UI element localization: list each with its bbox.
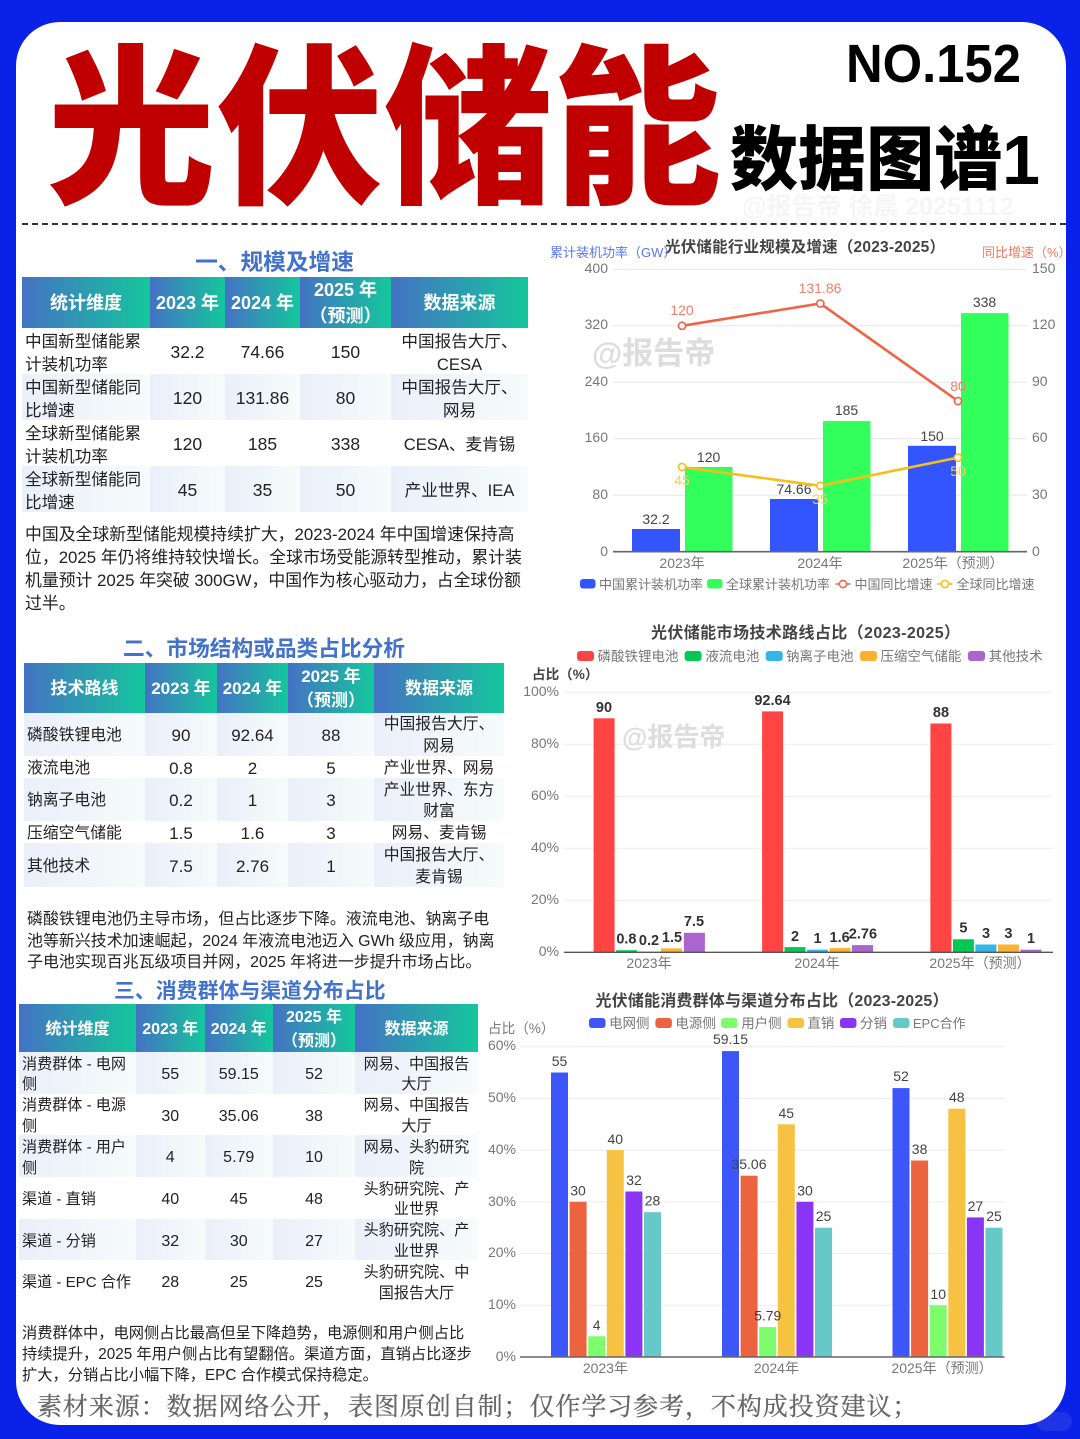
bar value labels: 120	[697, 449, 720, 465]
faint watermark line: @报告帝 徐晨 20251112	[742, 193, 1014, 221]
left axis labels: 320	[585, 316, 608, 332]
table 1: scale and growth: 80	[336, 388, 355, 408]
table 1: scale and growth: 74.66	[241, 342, 284, 362]
table 3: consumer groups and channels: 侧	[22, 1118, 37, 1135]
table 2: technology routes: 麦肯锡	[415, 869, 463, 886]
right axis labels: 90	[1032, 373, 1048, 389]
table 2: technology routes: 7.5	[169, 857, 193, 876]
table 2: technology routes: 中国报告大厅、	[384, 716, 494, 733]
y axis labels: 50%	[488, 1089, 516, 1105]
chart 1 legend	[580, 577, 1035, 592]
bar value labels: 40	[608, 1131, 623, 1147]
table 3: consumer groups and channels: 32	[161, 1233, 179, 1250]
table 3: consumer groups and channels: 25	[305, 1274, 323, 1291]
chart 1 legend: 全球同比增速	[956, 577, 1035, 592]
bar value labels: 1	[1027, 931, 1035, 947]
table 1: scale and growth: 比增速	[25, 492, 75, 512]
chart 1: scale and growth combo chart	[550, 237, 1072, 592]
table 1: scale and growth: 2025 年	[314, 280, 377, 300]
right axis labels: 150	[1032, 260, 1056, 276]
table 1: scale and growth: 全球新型储能累	[25, 424, 141, 442]
line: China growth: 80	[950, 378, 966, 394]
chart 2 legend: 其他技术	[989, 649, 1043, 664]
chart 3 legend: 分销	[860, 1016, 887, 1031]
table 2: technology routes: 2024 年	[223, 679, 282, 698]
table 3: consumer groups and channels: 网易、中国报告	[364, 1097, 469, 1114]
right axis labels	[1032, 260, 1056, 559]
table 2: technology routes: 磷酸铁锂电池	[27, 727, 122, 744]
chart 2 legend: 液流电池	[705, 649, 759, 664]
table 3: consumer groups and channels: 消费群体 - 电源	[22, 1097, 126, 1114]
bar value labels: 92.64	[754, 693, 791, 709]
bar value labels	[596, 693, 1035, 949]
paragraph 2: 子电池实现百兆瓦级项目并网，2025 年将进一步提升市场占比。	[27, 954, 481, 971]
bar value labels: 2	[791, 929, 799, 945]
bars	[551, 1051, 1002, 1357]
table 3: consumer groups and channels: 数据来源	[384, 1020, 448, 1038]
bar value labels: 0.2	[639, 933, 659, 949]
paragraph 1: 位，2025 年仍将维持较快增长。全球市场受能源转型推动，累计装	[25, 548, 522, 567]
table 3: consumer groups and channels: 10	[305, 1149, 323, 1166]
y axis labels: 60%	[488, 1037, 516, 1053]
bar value labels: 2.76	[849, 926, 877, 942]
table 3: consumer groups and channels: 头豹研究院、产	[364, 1222, 469, 1239]
chart 1 title: 光伏储能行业规模及增速（2023-2025）	[665, 237, 945, 256]
table 1: scale and growth: 120	[173, 388, 202, 408]
table 2: technology routes: 1	[326, 857, 336, 876]
line: China growth: 131.86	[799, 280, 842, 296]
bar value labels: 4	[593, 1317, 601, 1333]
table 3: consumer groups and channels: 业世界	[394, 1243, 439, 1260]
chart 1 legend: 全球累计装机功率	[726, 577, 830, 592]
bar value labels: 52	[893, 1068, 909, 1084]
table 3: consumer groups and channels: 35.06	[219, 1108, 259, 1125]
table 3: consumer groups and channels: 30	[161, 1108, 179, 1125]
bar value labels: 45	[779, 1105, 794, 1121]
bar value labels: 90	[596, 700, 612, 716]
bar value labels: 25	[986, 1208, 1002, 1224]
table 2: technology routes: （预测）	[297, 691, 365, 710]
right axis labels: 60	[1032, 429, 1048, 445]
bar value labels: 5	[959, 920, 967, 936]
table 3: consumer groups and channels: 2025 年	[286, 1008, 342, 1026]
table 2: technology routes: 3	[326, 824, 336, 843]
subtitle: 数据图谱1: 数据图谱1	[730, 121, 1040, 199]
bar value labels: 338	[973, 294, 996, 310]
table 2: technology routes: 0.8	[169, 759, 193, 778]
line: China growth: 120	[670, 302, 694, 318]
line: China growth	[670, 280, 966, 405]
chart 1 watermark: @报告帝	[592, 336, 715, 371]
y axis labels: 80%	[531, 735, 559, 751]
left axis labels: 400	[585, 260, 608, 276]
section heading 1: 一、规模及增速	[195, 249, 354, 275]
axis names: 同比增速（%）	[982, 245, 1072, 260]
table 1: scale and growth: 产业世界、IEA	[405, 481, 514, 500]
line: global growth: 45	[674, 472, 690, 488]
table 2: technology routes: 92.64	[231, 726, 274, 745]
bars: global	[685, 313, 1008, 552]
table 2: technology routes: 液流电池	[27, 760, 90, 777]
x axis labels	[659, 555, 1004, 571]
grid and axes	[613, 269, 1027, 495]
left axis labels: 0	[600, 543, 608, 559]
line: global growth: 50	[950, 463, 966, 479]
table 2: technology routes: 中国报告大厅、	[384, 847, 494, 864]
dashed divider	[22, 223, 1066, 225]
table 2: technology routes: 2.76	[236, 857, 269, 876]
table 3: consumer groups and channels: 27	[305, 1233, 323, 1250]
table 3: consumer groups and channels: 头豹研究院、中	[364, 1264, 469, 1281]
table 3: consumer groups and channels: 业世界	[394, 1201, 439, 1218]
table 2: technology routes: 网易、麦肯锡	[392, 825, 486, 842]
bar value labels: 32.2	[642, 511, 670, 527]
x axis labels	[626, 955, 1031, 971]
grid lines	[564, 692, 1053, 900]
x axis labels: 2023年	[626, 955, 672, 971]
table 2: technology routes: 5	[326, 759, 336, 778]
table 1: scale and growth: 120	[173, 434, 202, 454]
table 1: scale and growth: 150	[331, 342, 360, 362]
bar value labels: 7.5	[684, 914, 704, 930]
left axis labels	[585, 260, 608, 559]
paragraph 3: 持续提升，2025 年用户侧占比有望翻倍。渠道方面，直销占比逐步	[22, 1346, 472, 1363]
issue number: NO.152	[846, 34, 1021, 94]
y axis labels: 0%	[496, 1348, 516, 1364]
table 2: technology routes	[24, 663, 504, 887]
table 1: scale and growth: （预测）	[310, 306, 382, 326]
table 3: consumer groups and channels: 40	[161, 1191, 179, 1208]
chart 2: technology share bar chart	[523, 623, 1053, 971]
bar value labels: 25	[816, 1208, 831, 1224]
table 1: scale and growth: 中国新型储能累	[25, 332, 141, 350]
table 2: technology routes: 2025 年	[301, 667, 361, 686]
bar value labels: 1.6	[830, 930, 850, 946]
paragraph 2	[27, 910, 495, 971]
y axis labels: 0%	[539, 943, 559, 959]
table 1: scale and growth: 131.86	[236, 388, 289, 408]
y axis labels: 20%	[488, 1244, 516, 1260]
table 1: scale and growth: CESA	[437, 354, 482, 374]
bar value labels: 5.79	[754, 1308, 782, 1324]
table 1: scale and growth: 数据来源	[424, 293, 496, 313]
chart 3 title: 光伏储能消费群体与渠道分布占比（2023-2025）	[596, 991, 948, 1010]
table 2: technology routes: 3	[326, 791, 336, 810]
bar value labels: 1.5	[662, 930, 682, 946]
y axis labels: 40%	[531, 839, 559, 855]
paragraph 3	[22, 1324, 472, 1384]
table 3: consumer groups and channels: 大厅	[401, 1118, 432, 1135]
table 1: scale and growth	[22, 277, 528, 512]
table 3: consumer groups and channels: 5.79	[223, 1149, 254, 1166]
bar value labels: 28	[645, 1192, 660, 1208]
title: 光伏储能: 光伏储能	[47, 35, 721, 227]
bar value labels	[552, 1031, 1002, 1333]
line: global growth: 35	[812, 491, 828, 507]
bar value labels: 38	[912, 1141, 928, 1157]
y axis labels: 60%	[531, 787, 559, 803]
chart 3 legend: 直销	[807, 1016, 834, 1031]
y axis labels	[488, 1037, 516, 1364]
y axis name: 占比（%）	[488, 1021, 554, 1036]
table 2: technology routes: 1.5	[169, 824, 193, 843]
table 3: consumer groups and channels: 48	[305, 1191, 323, 1208]
table 3: consumer groups and channels: 2023 年	[142, 1020, 198, 1038]
bar value labels: 0.8	[616, 932, 636, 948]
bar value labels: 3	[982, 926, 990, 942]
table 3: consumer groups and channels: 2024 年	[211, 1020, 267, 1038]
table 1: scale and growth: 中国新型储能同	[25, 378, 141, 396]
y axis labels	[523, 683, 559, 959]
table 1: scale and growth: 2023 年	[156, 293, 219, 313]
y axis name: 占比（%）	[532, 666, 598, 682]
chart 2 legend: 压缩空气储能	[880, 649, 961, 664]
table 2: technology routes: 0.2	[169, 791, 193, 810]
bar value labels	[642, 294, 996, 527]
bar value labels: 10	[930, 1286, 946, 1302]
table 3: consumer groups and channels: 45	[230, 1191, 248, 1208]
line: global growth	[674, 454, 966, 507]
table 3: consumer groups and channels: 30	[230, 1233, 248, 1250]
x axis labels: 2024年	[754, 1360, 799, 1376]
table 2: technology routes: 钠离子电池	[27, 792, 106, 809]
table 1: scale and growth: 计装机功率	[25, 354, 108, 374]
table 3: consumer groups and channels	[19, 1004, 478, 1302]
chart 2 legend: 钠离子电池	[786, 648, 854, 664]
bar value labels: 48	[949, 1089, 965, 1105]
bar value labels: 150	[920, 428, 944, 444]
x axis labels: 2025年（预测）	[902, 555, 1004, 571]
chart 3 legend: 电源侧	[675, 1016, 716, 1031]
table 2: technology routes: 2	[248, 759, 257, 778]
paragraph 2: 磷酸铁锂电池仍主导市场，但占比逐步下降。液流电池、钠离子电	[27, 911, 489, 928]
table 1: scale and growth: 中国报告大厅、	[401, 332, 518, 350]
chart 2 legend: 磷酸铁锂电池	[598, 649, 678, 664]
table 3: consumer groups and channels: （预测）	[282, 1032, 346, 1050]
table 1: scale and growth: 35	[253, 480, 272, 500]
table 1: scale and growth: 45	[178, 480, 197, 500]
paragraph 1: 过半。	[25, 594, 76, 613]
table 2: technology routes: 其他技术	[27, 858, 90, 875]
badge: faint corner watermark	[1036, 1412, 1072, 1431]
table 1: scale and growth: 2024 年	[231, 293, 294, 313]
table 2: technology routes: 88	[322, 726, 340, 745]
bar value labels: 35.06	[731, 1156, 767, 1172]
table 1: scale and growth: 计装机功率	[25, 446, 108, 466]
y axis labels: 10%	[488, 1296, 516, 1312]
bar value labels: 3	[1004, 926, 1012, 942]
table 1: scale and growth: 统计维度	[50, 293, 122, 313]
table 3: consumer groups and channels: 侧	[22, 1076, 37, 1093]
table 1: scale and growth: 338	[331, 434, 360, 454]
left axis labels: 80	[592, 486, 608, 502]
table 3: consumer groups and channels: 渠道 - 直销	[22, 1191, 96, 1208]
paragraph 3: 扩大，分销占比小幅下降，EPC 合作模式保持稳定。	[22, 1367, 378, 1384]
paragraph 1: 中国及全球新型储能规模持续扩大，2023-2024 年中国增速保持高	[25, 525, 514, 544]
table 3: consumer groups and channels: 大厅	[401, 1076, 432, 1093]
table 2: technology routes: 网易	[423, 738, 455, 755]
bars	[594, 711, 1041, 952]
table 3: consumer groups and channels: 统计维度	[45, 1020, 110, 1038]
chart 3 legend: EPC合作	[913, 1016, 966, 1031]
table 3: consumer groups and channels: 消费群体 - 电网	[22, 1056, 126, 1073]
bar value labels: 1	[813, 931, 822, 947]
bar value labels: 185	[835, 402, 858, 418]
x axis labels: 2025年（预测）	[891, 1360, 993, 1376]
chart 3 legend: 电网侧	[609, 1016, 650, 1031]
chart 3 legend: 用户侧	[741, 1015, 782, 1031]
x axis labels: 2024年	[797, 555, 843, 571]
x axis labels	[583, 1360, 993, 1376]
table 2: technology routes: 压缩空气储能	[27, 825, 122, 842]
table 3: consumer groups and channels: 38	[305, 1108, 323, 1125]
table 3: consumer groups and channels: 网易、头豹研究	[364, 1139, 469, 1156]
table 1: scale and growth: 50	[336, 480, 355, 500]
right axis labels: 0	[1032, 543, 1040, 559]
table 1: scale and growth: 比增速	[25, 400, 75, 420]
x axis labels: 2023年	[659, 555, 705, 571]
x axis labels: 2024年	[794, 955, 840, 971]
section heading 3: 三、消费群体与渠道分布占比	[114, 980, 386, 1003]
x axis labels: 2025年（预测）	[929, 955, 1031, 971]
x axis labels: 2023年	[583, 1360, 628, 1376]
table 3: consumer groups and channels: 消费群体 - 用户	[22, 1139, 126, 1156]
table 2: technology routes: 2023 年	[151, 679, 211, 698]
section heading 2: 二、市场结构或品类占比分析	[123, 636, 405, 661]
paragraph 1	[25, 525, 522, 613]
grid lines	[520, 1047, 1005, 1305]
table 3: consumer groups and channels: 渠道 - 分销	[22, 1233, 96, 1250]
table 3: consumer groups and channels: 网易、中国报告	[364, 1056, 469, 1073]
table 2: technology routes: 技术路线	[50, 679, 118, 698]
paragraph 3: 消费群体中，电网侧占比最高但呈下降趋势，电源侧和用户侧占比	[22, 1325, 464, 1342]
y axis labels: 20%	[531, 891, 559, 907]
table 3: consumer groups and channels: 55	[161, 1066, 179, 1083]
paragraph 1: 机量预计 2025 年突破 300GW，中国作为核心驱动力，占全球份额	[25, 571, 521, 590]
bars: China	[632, 446, 956, 552]
chart 3: consumer and channel bar chart	[488, 991, 1005, 1376]
table 3: consumer groups and channels: 25	[230, 1274, 248, 1291]
bar value labels: 32	[626, 1172, 642, 1188]
right axis labels: 30	[1032, 486, 1048, 502]
y axis labels: 100%	[523, 683, 559, 699]
bar value labels: 30	[797, 1182, 813, 1198]
table 1: scale and growth: 32.2	[170, 342, 205, 362]
y axis labels: 30%	[488, 1193, 516, 1209]
chart 2 legend	[577, 648, 1043, 664]
bar value labels: 30	[570, 1182, 586, 1198]
table 3: consumer groups and channels: 渠道 - EPC 合作	[22, 1274, 131, 1291]
table 2: technology routes: 数据来源	[405, 679, 473, 698]
bar value labels: 88	[933, 705, 949, 721]
table 2: technology routes: 1.6	[241, 824, 264, 843]
table 2: technology routes: 1	[248, 791, 257, 810]
right axis labels: 120	[1032, 316, 1056, 332]
table 2: technology routes: 产业世界、东方	[384, 782, 494, 798]
chart 1 legend: 中国同比增速	[854, 577, 933, 592]
chart 1 legend: 中国累计装机功率	[599, 577, 703, 592]
table 2: technology routes: 财富	[423, 803, 455, 820]
table 3: consumer groups and channels: 28	[161, 1274, 179, 1291]
chart 2 title: 光伏储能市场技术路线占比（2023-2025）	[651, 623, 960, 642]
bar value labels: 27	[968, 1198, 983, 1214]
table 1: scale and growth: CESA、麦肯锡	[404, 435, 515, 454]
table 1: scale and growth: 185	[248, 434, 277, 454]
axis names: 累计装机功率（GW）	[550, 245, 676, 260]
left axis labels: 240	[585, 373, 608, 389]
table 3: consumer groups and channels: 院	[409, 1160, 424, 1177]
left axis labels: 160	[585, 429, 608, 445]
footer source note: 素材来源：数据网络公开，表图原创自制；仅作学习参考，不构成投资建议；	[37, 1394, 918, 1421]
table 1: scale and growth: 网易	[443, 400, 476, 420]
bar value labels: 55	[552, 1053, 567, 1069]
table 3: consumer groups and channels: 52	[305, 1066, 323, 1083]
bar value labels: 74.66	[776, 481, 812, 497]
chart 3 legend	[589, 1015, 966, 1031]
table 1: scale and growth: 中国报告大厅、	[401, 378, 518, 396]
bar value labels: 59.15	[713, 1031, 748, 1047]
table 3: consumer groups and channels: 4	[166, 1149, 175, 1166]
chart 2 watermark: @报告帝	[622, 722, 725, 752]
table 3: consumer groups and channels: 侧	[22, 1160, 37, 1177]
table 3: consumer groups and channels: 59.15	[219, 1066, 259, 1083]
table 2: technology routes: 90	[172, 726, 190, 745]
table 3: consumer groups and channels: 头豹研究院、产	[364, 1181, 469, 1198]
axis names	[550, 245, 1072, 260]
table 1: scale and growth: 全球新型储能同	[25, 470, 141, 488]
y axis labels: 40%	[488, 1141, 516, 1157]
table 2: technology routes: 产业世界、网易	[384, 760, 494, 777]
table 3: consumer groups and channels: 国报告大厅	[379, 1285, 454, 1302]
paragraph 2: 池等新兴技术加速崛起，2024 年液流电池迈入 GWh 级应用，钠离	[27, 933, 495, 950]
